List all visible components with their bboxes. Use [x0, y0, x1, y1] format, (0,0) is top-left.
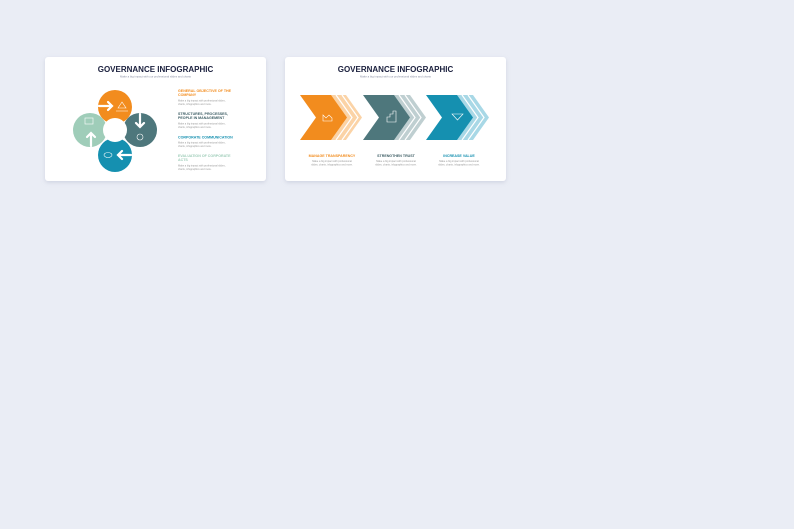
text: strengthen trust	[375, 154, 417, 166]
text: increase value: Make a big impact with professional	[439, 160, 479, 163]
text: structures: STRUCTURES, PROCESSES,	[178, 112, 228, 116]
chevron: orange	[300, 95, 362, 140]
text: objective: Make a big impact with professional slides,	[178, 100, 226, 102]
text: objective: GENERAL OBJECTIVE OF THE	[178, 89, 232, 93]
chevron: teal	[363, 95, 426, 140]
text: strengthen trust: Make a big impact with professional	[376, 160, 416, 163]
panel: left card	[45, 57, 266, 181]
text: communication: CORPORATE COMMUNICATION	[178, 136, 233, 140]
text: evaluation: charts, infographics and more.	[178, 168, 212, 171]
text: evaluation: ACTS	[178, 158, 188, 162]
text: strengthen trust: STRENGTHEN TRUST	[377, 154, 416, 158]
text: communication: Make a big impact with professional slides,	[178, 142, 226, 144]
text: manage transparency: Make a big impact with professional	[312, 160, 352, 163]
text: manage transparency	[309, 154, 356, 166]
text: structures: Make a big impact with professional slides,	[178, 122, 226, 126]
text: evaluation: Make a big impact with professional slides,	[178, 164, 226, 168]
text: structures: charts, infographics and more.	[178, 126, 212, 129]
text: evaluation	[178, 154, 231, 171]
text: increase value: INCREASE VALUE	[443, 154, 475, 158]
text: structures	[178, 112, 228, 129]
text: communication	[178, 136, 233, 148]
text: objective	[178, 89, 232, 106]
subtitle right: Make a big impact with our professional slides and charts	[360, 74, 432, 78]
text: manage transparency: slides, charts, infographics and more.	[311, 164, 353, 166]
text: manage transparency: MANAGE TRANSPARENCY	[309, 154, 356, 158]
diagram: four circles	[73, 90, 157, 172]
subtitle left: Make a big impact with our professional slides and charts	[120, 74, 192, 78]
text: increase value	[438, 154, 480, 166]
title left: GOVERNANCE INFOGRAPHIC	[98, 65, 214, 74]
title right: GOVERNANCE INFOGRAPHIC	[338, 65, 454, 74]
text: increase value: slides, charts, infographics and more.	[438, 164, 480, 166]
chevron: blue	[426, 95, 489, 140]
text: objective: COMPANY	[178, 93, 197, 97]
text: strengthen trust: slides, charts, infographics and more.	[375, 164, 417, 166]
panel: right card	[285, 57, 506, 181]
text: objective: charts, infographics and more.	[178, 103, 212, 106]
text: communication: charts, infographics and more.	[178, 145, 212, 148]
text: evaluation: EVALUATION OF CORPORATE	[178, 154, 231, 158]
text: structures: PEOPLE IN MANAGEMENT	[178, 116, 225, 120]
